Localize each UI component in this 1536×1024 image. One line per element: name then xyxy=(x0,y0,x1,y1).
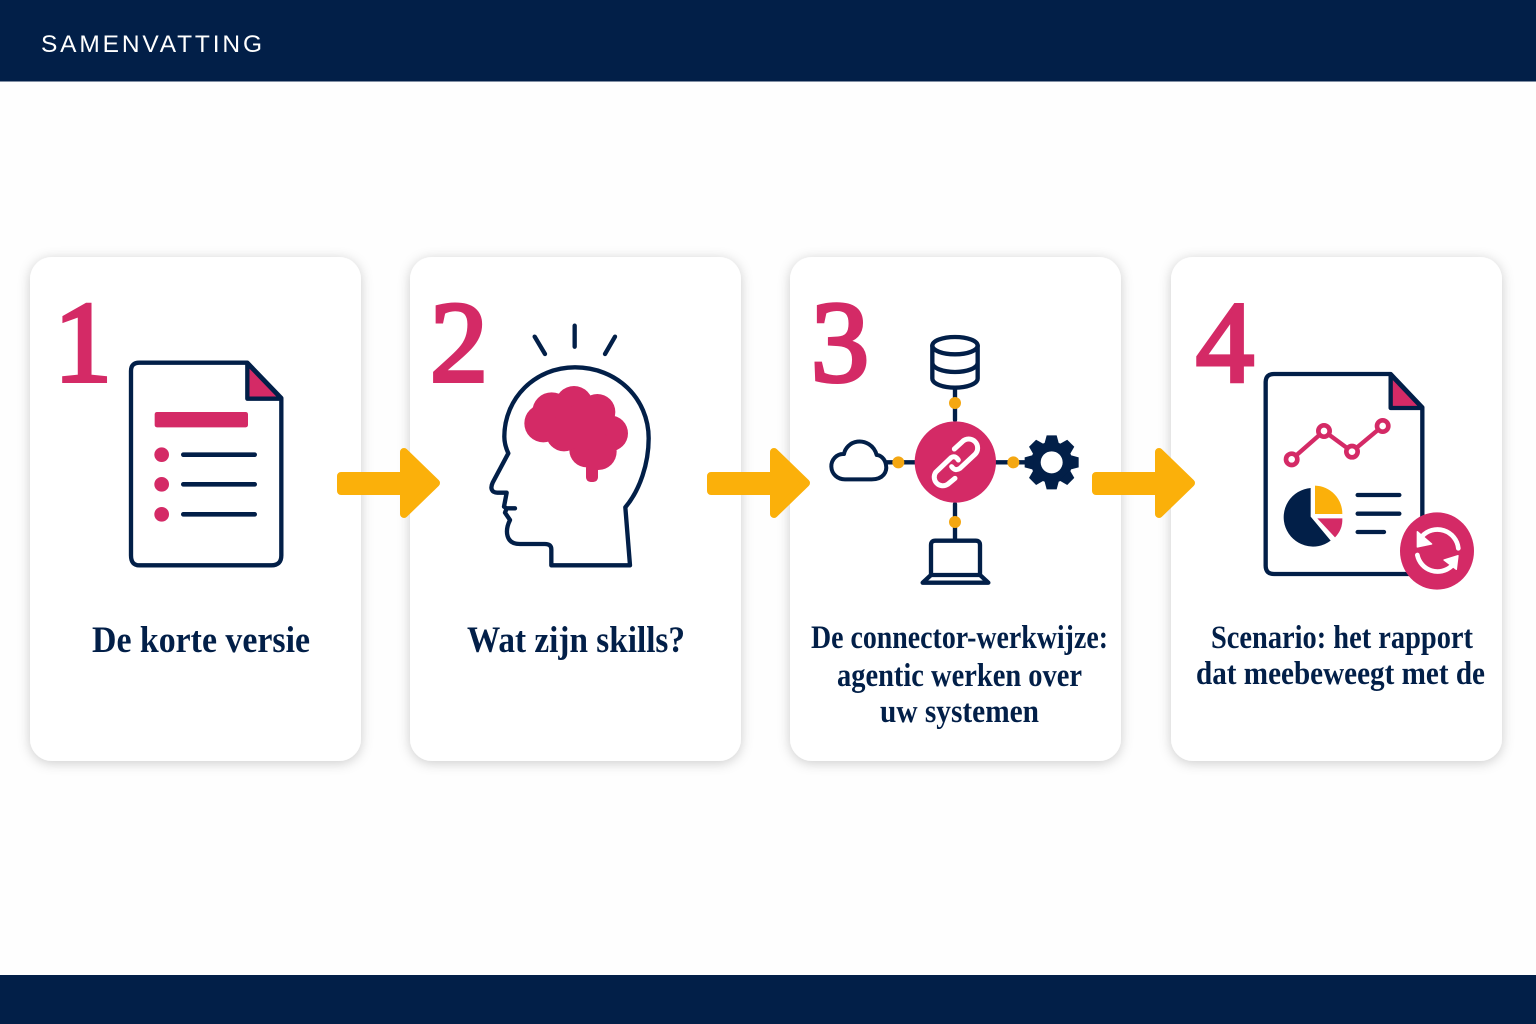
panel: step 1 xyxy=(30,257,361,761)
step 4 label: dat meebeweegt met de xyxy=(1196,656,1485,692)
header bar xyxy=(0,0,1536,82)
panel: step 4 xyxy=(1171,257,1502,761)
arrow: step 3 to 4 xyxy=(1096,452,1191,514)
icon: summary document xyxy=(131,363,281,565)
step 4 label: Scenario: het rapport xyxy=(1211,620,1473,656)
icon: report with charts xyxy=(1266,374,1474,590)
arrow: step 1 to 2 xyxy=(341,452,436,514)
header title: SAMENVATTING xyxy=(41,31,262,58)
step 3 label: De connector-werkwijze: xyxy=(811,620,1108,656)
step 3 label: uw systemen xyxy=(880,694,1039,730)
step 1 label: De korte versie xyxy=(92,620,310,661)
icon: head with brain xyxy=(491,326,649,565)
step 3 label: agentic werken over xyxy=(837,658,1082,694)
step number 3: 3 xyxy=(811,279,869,407)
step 2 label: Wat zijn skills? xyxy=(467,620,685,661)
panel: step 2 xyxy=(410,257,741,761)
chain link xyxy=(934,439,978,486)
arrow: step 2 to 3 xyxy=(711,452,806,514)
footer bar xyxy=(0,975,1536,1024)
step number 4: 4 xyxy=(1196,279,1254,407)
step number 2: 2 xyxy=(430,279,488,407)
step number 1: 1 xyxy=(54,279,112,407)
step 4 label xyxy=(1196,620,1485,692)
panel: step 3 xyxy=(790,257,1121,761)
step 3 label xyxy=(811,620,1108,730)
icon: connector hub xyxy=(831,337,1079,583)
